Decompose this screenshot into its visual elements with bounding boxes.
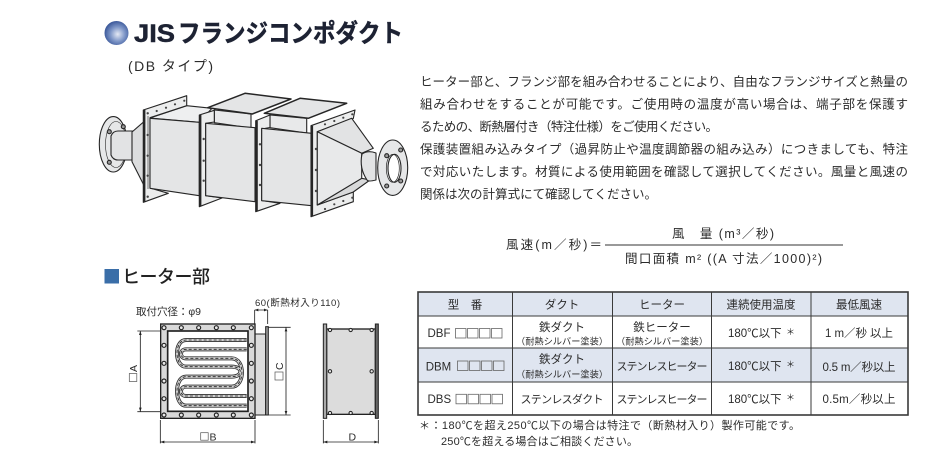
row DBF xyxy=(428,320,893,346)
row DBF: 鉄ヒーター xyxy=(633,320,691,334)
diagram labels: 取付穴径：φ9 xyxy=(136,305,201,318)
row DBS xyxy=(428,392,896,406)
row DBF: （耐熱シルバー塗装） xyxy=(516,336,608,346)
body text paragraph: るための、断熱層付き（特注仕様）をご使用ください。 xyxy=(420,119,718,134)
section 2 with terminal box xyxy=(199,93,291,207)
footnote xyxy=(419,418,800,448)
row DBF: （耐熱シルバー塗装） xyxy=(616,336,708,346)
row DBS: DBS xyxy=(428,394,451,406)
heading text: ヒーター部 xyxy=(122,267,210,287)
body text paragraph: 保護装置組み込みタイプ（過昇防止や温度調節器の組み込み）につきましても、特注 xyxy=(420,142,908,156)
front view flange xyxy=(161,324,268,418)
table grid xyxy=(418,292,908,415)
left round flange and reducer xyxy=(99,117,144,184)
icon: blue sphere bullet xyxy=(104,21,128,45)
formula: air velocity xyxy=(506,227,843,266)
row DBS: 180℃以下 xyxy=(728,393,782,406)
formula: air velocity: 間口面積 m² ((A 寸法／1000)²) xyxy=(625,251,822,266)
row DBS: 0.5m／秒以上 xyxy=(822,392,896,406)
body text paragraph: ヒーター部と、フランジ部を組み合わせることにより、自由なフランジサイズと熱量の xyxy=(420,74,908,89)
row DBF: 180℃以下 xyxy=(728,327,782,340)
model code squares xyxy=(456,394,502,404)
dimension label D: D xyxy=(348,432,356,444)
serpentine heater element xyxy=(177,340,247,406)
table: model specifications xyxy=(418,292,908,415)
dimension arrowheads xyxy=(139,309,378,443)
row DBS: ステンレスダクト xyxy=(520,392,604,406)
flange bolt holes xyxy=(146,100,353,210)
formula: air velocity: 風 量 (m³／秒) xyxy=(672,227,774,241)
header and shaded row backgrounds xyxy=(418,292,908,382)
body text paragraph xyxy=(420,74,908,202)
illustration: assembled duct xyxy=(99,93,408,217)
table header: 最低風速 xyxy=(836,298,882,312)
row DBS: ステンレスヒーター xyxy=(616,393,708,406)
section 1 xyxy=(143,96,212,202)
table header: ヒーター xyxy=(639,298,685,312)
row DBM: 鉄ダクト xyxy=(539,352,585,366)
table header: 型 番 xyxy=(448,298,483,312)
formula: air velocity: 風速(m／秒)＝ xyxy=(506,238,602,252)
title text katakana: フランジコンポダクト xyxy=(178,19,403,48)
row DBM: 180℃以下 xyxy=(728,360,782,373)
side view xyxy=(323,324,378,418)
row DBM: ステンレスヒーター xyxy=(616,360,708,373)
diagram labels: 60(断熱材入り110) xyxy=(255,297,340,309)
dimension label C xyxy=(274,362,286,380)
table header xyxy=(448,298,882,312)
row DBF: DBF xyxy=(428,328,450,340)
subtitle: DB type: (DB タイプ) xyxy=(128,58,213,74)
row DBM: （耐熱シルバー塗装） xyxy=(516,368,608,380)
row DBM: 0.5 m／秒以上 xyxy=(822,360,896,374)
dimension label A xyxy=(128,365,140,382)
title text JIS: JIS xyxy=(134,20,175,48)
model code squares xyxy=(456,328,502,338)
table header: ダクト xyxy=(545,298,579,312)
row DBF: 鉄ダクト xyxy=(539,320,585,334)
dimension label B: B xyxy=(210,432,217,444)
table header: 連続使用温度 xyxy=(726,298,796,312)
dimension lines xyxy=(137,310,378,443)
icon: blue square xyxy=(104,269,119,284)
row DBM xyxy=(426,352,896,380)
dimension label C: C xyxy=(274,362,286,370)
section 3 with terminal box xyxy=(256,98,347,212)
dimension label A: A xyxy=(128,365,140,372)
row DBF: ＊ xyxy=(786,327,795,337)
body text paragraph: で対応いたします。材質による使用範囲を確認して選択してください。風量と風速の xyxy=(420,164,908,179)
diagram: heater front and side view xyxy=(137,309,378,443)
body text paragraph: 関係は次の計算式にて確認してください。 xyxy=(420,186,657,202)
title: JIS flange duct xyxy=(104,19,403,48)
model code squares xyxy=(458,361,504,370)
dimension label B xyxy=(201,432,217,444)
footnote: ＊：180℃を超え250℃以下の場合は特注で（断熱材入り）製作可能です。 xyxy=(419,418,800,432)
row DBM: DBM xyxy=(426,362,451,374)
row DBS: ＊ xyxy=(786,392,795,402)
body text paragraph: 組み合わせをすることが可能です。ご使用時の温度が高い場合は、端子部を保護す xyxy=(420,96,908,112)
row DBF: 1 m／秒 以上 xyxy=(825,326,893,340)
heading: heater section xyxy=(104,267,210,287)
row DBM: ＊ xyxy=(786,360,795,370)
footnote: 250℃を超える場合はご相談ください。 xyxy=(441,434,638,448)
diagram labels xyxy=(128,297,356,444)
right outlet flange plate and reducer xyxy=(311,110,408,217)
